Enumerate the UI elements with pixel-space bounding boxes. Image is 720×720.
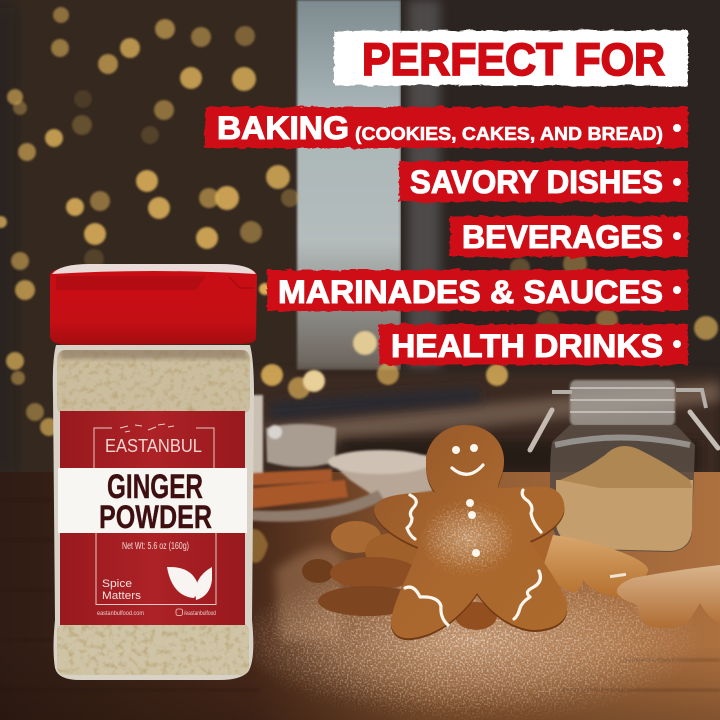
glass jar of ground ginger bbox=[530, 380, 718, 552]
bokeh lights bbox=[0, 7, 718, 436]
slogan bbox=[102, 578, 142, 602]
sugar dusting bbox=[420, 500, 515, 576]
list item: savory dishes: SAVORY DISHES bbox=[410, 164, 663, 200]
blurred bowl, plate and cinnamon sticks bbox=[245, 395, 436, 563]
lid rim bbox=[52, 264, 256, 274]
list item: marinades and sauces: MARINADES & SAUCES bbox=[278, 274, 663, 310]
lid bbox=[50, 268, 257, 345]
background cookies bbox=[302, 521, 720, 630]
website and social: eastanbulfood.com bbox=[97, 611, 144, 617]
cookie stack bbox=[302, 521, 562, 630]
product jar bbox=[50, 264, 257, 680]
list item: baking bbox=[205, 107, 688, 148]
cookie body bbox=[374, 425, 567, 638]
birds bbox=[120, 424, 174, 432]
slogan: Matters bbox=[102, 590, 142, 602]
label bbox=[60, 411, 245, 625]
product name: POWDER bbox=[99, 499, 212, 535]
jar body bbox=[53, 345, 254, 680]
product name bbox=[99, 468, 212, 535]
icing bbox=[405, 465, 541, 625]
heading: perfect for: PERFECT FOR bbox=[362, 34, 665, 85]
website and social bbox=[97, 609, 216, 617]
list item: baking: BAKING bbox=[217, 110, 349, 146]
label white band bbox=[58, 468, 247, 533]
flour dusting on table bbox=[252, 544, 695, 720]
cookie far right bbox=[617, 565, 720, 628]
label frame bbox=[94, 428, 216, 604]
net weight: Net Wt: 5.6 oz (160g) bbox=[122, 541, 189, 552]
slogan: Spice bbox=[102, 578, 132, 590]
eyes and buttons bbox=[452, 444, 480, 557]
brand name: EASTANBUL bbox=[105, 436, 202, 456]
list item: baking: (COOKIES, CAKES, AND BREAD) bbox=[355, 123, 663, 144]
product name: GINGER bbox=[107, 468, 203, 506]
wooden table bbox=[0, 472, 720, 720]
cookie shadow edge bbox=[374, 427, 567, 640]
ginger powder bottom bbox=[57, 623, 249, 675]
list item: health drinks: HEALTH DRINKS bbox=[391, 328, 663, 364]
list item: beverages: BEVERAGES bbox=[462, 219, 663, 255]
gingerbread man bbox=[374, 425, 567, 640]
website and social: /eastanbulfood bbox=[184, 611, 216, 617]
cookie right bbox=[543, 535, 648, 597]
icon: leaves bbox=[167, 567, 212, 600]
ginger powder top bbox=[57, 346, 250, 414]
